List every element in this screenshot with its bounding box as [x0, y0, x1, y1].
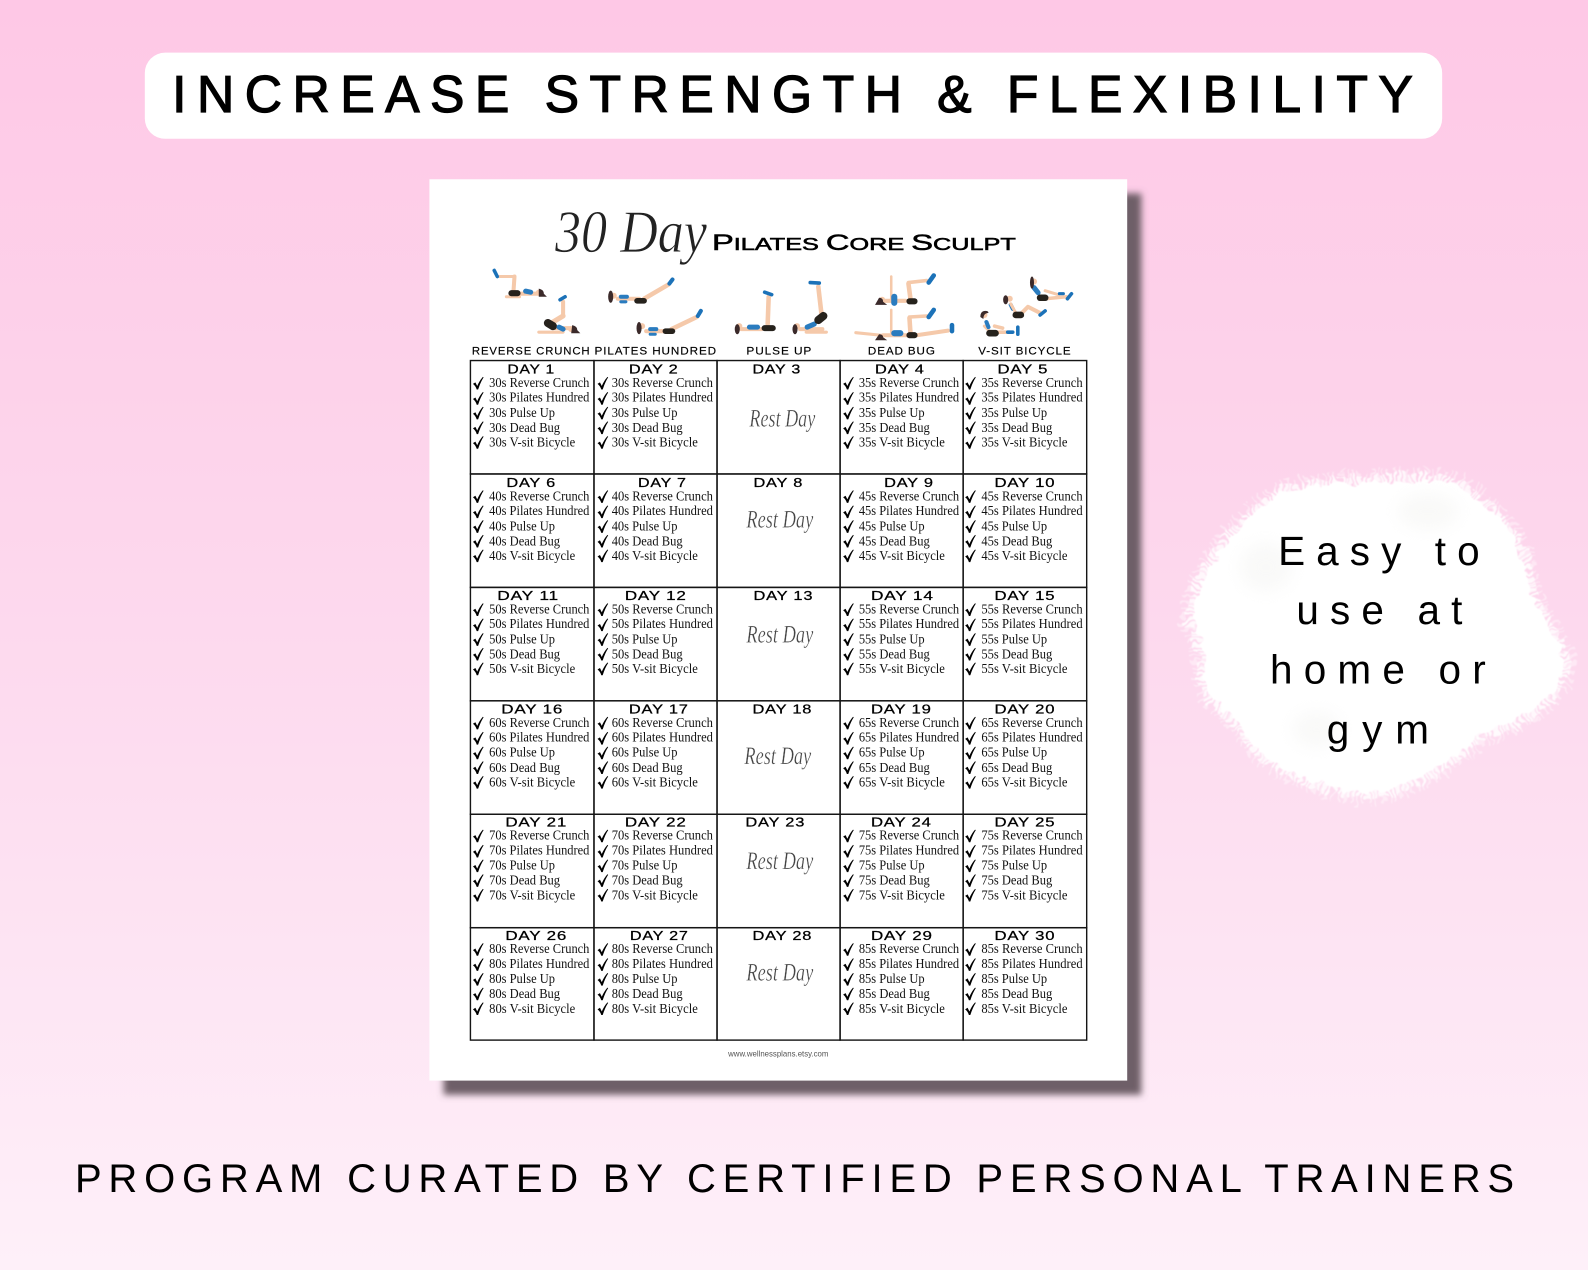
day 30: 85s V-sit Bicycle: [981, 1001, 1068, 1016]
day 23 rest: [717, 814, 840, 928]
day 29: 85s Dead Bug: [859, 986, 930, 1001]
day 9: 45s Dead Bug: [859, 533, 930, 548]
day 20: DAY 20: [995, 703, 1055, 717]
day 6: [470, 474, 594, 587]
day 17: 60s Reverse Crunch: [612, 715, 713, 730]
day 12: [594, 587, 717, 701]
day 4: 35s Reverse Crunch: [859, 375, 959, 390]
day 3 rest: [717, 361, 840, 474]
day 19: 65s V-sit Bicycle: [859, 775, 945, 790]
day 8 rest: DAY 8: [753, 476, 803, 490]
day 25: DAY 25: [995, 816, 1055, 830]
day 15: DAY 15: [995, 589, 1055, 603]
day 11: 50s Pilates Hundred: [489, 616, 590, 631]
day 29: [840, 928, 963, 1040]
day 19: 65s Pulse Up: [859, 745, 925, 760]
day 6: 40s Pilates Hundred: [489, 503, 590, 518]
day 22: [594, 814, 717, 928]
callout: easy to use at home or gym: [1193, 480, 1564, 792]
day 7: 40s Pilates Hundred: [612, 503, 713, 518]
day 1: 30s Reverse Crunch: [489, 375, 590, 390]
day 7: DAY 7: [638, 476, 687, 490]
calendar grid: [470, 361, 1087, 1040]
day 16: [470, 701, 594, 814]
day 27: 80s Pulse Up: [612, 971, 678, 986]
day 25: 75s Reverse Crunch: [981, 828, 1083, 843]
day 5: 35s Pilates Hundred: [981, 390, 1083, 405]
day 24: 75s Dead Bug: [859, 873, 930, 888]
day 16: 60s Reverse Crunch: [489, 715, 590, 730]
day 10: DAY 10: [995, 476, 1055, 490]
day 30: 85s Reverse Crunch: [981, 941, 1083, 956]
day 11: [470, 587, 594, 701]
day 15: 55s V-sit Bicycle: [981, 661, 1068, 676]
day 22: 70s Pilates Hundred: [612, 842, 713, 857]
day 29: 85s V-sit Bicycle: [859, 1001, 945, 1016]
icon: dead bug figures: [856, 275, 952, 340]
day 1: 30s Pulse Up: [489, 405, 555, 420]
day 15: 55s Pulse Up: [981, 631, 1048, 646]
day 10: 45s V-sit Bicycle: [981, 548, 1068, 563]
day 22: DAY 22: [625, 816, 687, 830]
day 28 rest: [717, 928, 840, 1040]
day 27: DAY 27: [630, 929, 689, 943]
day 22: 70s Reverse Crunch: [612, 828, 713, 843]
day 12: 50s Pulse Up: [612, 631, 678, 646]
day 15: 55s Reverse Crunch: [981, 601, 1083, 616]
day 15: 55s Pilates Hundred: [981, 616, 1083, 631]
icon: v-sit bicycle figures: [980, 276, 1071, 334]
day 25: 75s Pilates Hundred: [981, 842, 1083, 857]
day 25: 75s V-sit Bicycle: [981, 887, 1068, 902]
day 2: [594, 361, 717, 474]
icon: reverse crunch figures: [494, 270, 580, 333]
sheet: [429, 179, 1127, 1081]
day 11: DAY 11: [497, 589, 559, 603]
day 9: DAY 9: [884, 476, 934, 490]
day 22: 70s V-sit Bicycle: [612, 887, 698, 902]
day 14: [840, 587, 963, 701]
footer tagline: PROGRAM CURATED BY CERTIFIED PERSONAL TRAINERS: [75, 1157, 1514, 1201]
day 26: 80s Pilates Hundred: [489, 956, 590, 971]
day 20: 65s V-sit Bicycle: [981, 775, 1068, 790]
day 7: 40s Reverse Crunch: [612, 488, 713, 503]
day 16: DAY 16: [501, 703, 563, 717]
day 21: DAY 21: [505, 816, 567, 830]
callout: easy to use at home or gym: gym: [1327, 706, 1429, 752]
day 1: DAY 1: [507, 363, 555, 377]
day 20: 65s Pilates Hundred: [981, 730, 1083, 745]
day 9: 45s Reverse Crunch: [859, 488, 959, 503]
day 20: [963, 701, 1087, 814]
day 12: 50s Dead Bug: [612, 646, 683, 661]
day 1: 30s Dead Bug: [489, 420, 560, 435]
day 28 rest: Rest Day: [746, 958, 814, 986]
day 5: 35s Reverse Crunch: [981, 375, 1083, 390]
day 12: 50s V-sit Bicycle: [612, 661, 698, 676]
day 14: 55s V-sit Bicycle: [859, 661, 945, 676]
day 24: 75s Pulse Up: [859, 858, 925, 873]
day 3 rest: DAY 3: [752, 363, 801, 377]
day 11: 50s Reverse Crunch: [489, 601, 590, 616]
day 2: 30s Pilates Hundred: [612, 390, 713, 405]
day 2: 30s Reverse Crunch: [612, 375, 713, 390]
day 2: 30s V-sit Bicycle: [612, 435, 698, 450]
sheet title: [554, 199, 1017, 266]
day 20: 65s Reverse Crunch: [981, 715, 1083, 730]
day 1: 30s Pilates Hundred: [489, 390, 590, 405]
day 26: 80s Dead Bug: [489, 986, 560, 1001]
icon: pulse up figures: [735, 283, 826, 334]
exercise labels: [472, 345, 1071, 357]
day 25: 75s Pulse Up: [981, 858, 1048, 873]
day 28 rest: DAY 28: [752, 929, 812, 943]
day 11: 50s Pulse Up: [489, 631, 555, 646]
day 3 rest: Rest Day: [749, 404, 816, 432]
day 17: [594, 701, 717, 814]
day 4: [840, 361, 963, 474]
day 14: 55s Dead Bug: [859, 646, 930, 661]
day 5: 35s Pulse Up: [981, 405, 1048, 420]
day 8 rest: [717, 474, 840, 587]
day 26: 80s Pulse Up: [489, 971, 555, 986]
day 17: 60s Dead Bug: [612, 760, 683, 775]
day 10: [963, 474, 1087, 587]
day 24: 75s V-sit Bicycle: [859, 887, 945, 902]
callout: easy to use at home or gym: use at: [1296, 587, 1462, 633]
printable calendar sheet with shadow: [429, 179, 1141, 1095]
day 29: 85s Pulse Up: [859, 971, 925, 986]
day 6: 40s Dead Bug: [489, 533, 560, 548]
day 10: 45s Pulse Up: [981, 518, 1048, 533]
day 24: DAY 24: [871, 816, 932, 830]
day 21: 70s Dead Bug: [489, 873, 560, 888]
day 22: 70s Pulse Up: [612, 858, 678, 873]
day 20: 65s Pulse Up: [981, 745, 1048, 760]
day 24: [840, 814, 963, 928]
day 12: DAY 12: [625, 589, 687, 603]
day 23 rest: Rest Day: [746, 847, 814, 875]
day 9: 45s V-sit Bicycle: [859, 548, 945, 563]
exercise labels: PILATES HUNDRED: [594, 345, 717, 357]
day 13 rest: Rest Day: [746, 621, 814, 649]
day 10: 45s Reverse Crunch: [981, 488, 1083, 503]
callout: easy to use at home or gym: Easy to: [1278, 528, 1480, 574]
day 14: 55s Reverse Crunch: [859, 601, 959, 616]
exercise illustrations: [494, 270, 1071, 340]
day 26: DAY 26: [505, 929, 567, 943]
callout: easy to use at home or gym: home or: [1270, 647, 1486, 693]
day 19: 65s Dead Bug: [859, 760, 930, 775]
day 27: 80s Dead Bug: [612, 986, 683, 1001]
day 18 rest: Rest Day: [744, 742, 812, 770]
day 21: [470, 814, 594, 928]
day 7: 40s Dead Bug: [612, 533, 683, 548]
sheet drop shadow: [444, 193, 1141, 1095]
day 21: 70s Pilates Hundred: [489, 842, 590, 857]
day 16: 60s V-sit Bicycle: [489, 775, 575, 790]
exercise labels: PULSE UP: [746, 345, 812, 357]
day 19: DAY 19: [871, 703, 932, 717]
header banner: [145, 53, 1442, 139]
day 15: 55s Dead Bug: [981, 646, 1053, 661]
day 16: 60s Pilates Hundred: [489, 730, 590, 745]
day 6: 40s V-sit Bicycle: [489, 548, 575, 563]
sheet title: 30 Day: [554, 199, 707, 266]
day 13 rest: DAY 13: [753, 589, 813, 603]
day 30: 85s Pulse Up: [981, 971, 1048, 986]
day 15: [963, 587, 1087, 701]
day 30: DAY 30: [995, 929, 1055, 943]
day 1: [470, 361, 594, 474]
day 30: 85s Pilates Hundred: [981, 956, 1083, 971]
day 18 rest: [717, 701, 840, 814]
day 11: 50s Dead Bug: [489, 646, 560, 661]
day 13 rest: [717, 587, 840, 701]
day 10: 45s Pilates Hundred: [981, 503, 1083, 518]
day 20: 65s Dead Bug: [981, 760, 1053, 775]
day 27: 80s Reverse Crunch: [612, 941, 713, 956]
frayed white blob: [1193, 480, 1564, 792]
day 9: 45s Pulse Up: [859, 518, 925, 533]
website url: www.wellnessplans.etsy.com: [727, 1049, 829, 1058]
sheet title: P ILATES C ORE S CULPT: [712, 230, 1017, 255]
day 26: 80s V-sit Bicycle: [489, 1001, 575, 1016]
day 2: 30s Dead Bug: [612, 420, 683, 435]
day 12: 50s Pilates Hundred: [612, 616, 713, 631]
day 4: 35s Dead Bug: [859, 420, 930, 435]
day 5: DAY 5: [998, 363, 1048, 377]
day 9: [840, 474, 963, 587]
day 25: [963, 814, 1087, 928]
day 22: 70s Dead Bug: [612, 873, 683, 888]
day 24: 75s Pilates Hundred: [859, 842, 959, 857]
day 27: 80s Pilates Hundred: [612, 956, 713, 971]
day 2: 30s Pulse Up: [612, 405, 678, 420]
day 29: 85s Reverse Crunch: [859, 941, 959, 956]
day 4: DAY 4: [875, 363, 925, 377]
day 17: 60s Pilates Hundred: [612, 730, 713, 745]
day 23 rest: DAY 23: [745, 816, 805, 830]
day 17: DAY 17: [629, 703, 689, 717]
day 10: 45s Dead Bug: [981, 533, 1053, 548]
day 14: DAY 14: [871, 589, 934, 603]
day 7: 40s Pulse Up: [612, 518, 678, 533]
day 5: 35s V-sit Bicycle: [981, 435, 1068, 450]
day 19: 65s Reverse Crunch: [859, 715, 959, 730]
day 4: 35s V-sit Bicycle: [859, 435, 945, 450]
day 14: 55s Pulse Up: [859, 631, 925, 646]
day 17: 60s V-sit Bicycle: [612, 775, 698, 790]
day 18 rest: DAY 18: [752, 703, 812, 717]
exercise labels: V-SIT BICYCLE: [978, 345, 1071, 357]
day 21: 70s V-sit Bicycle: [489, 887, 575, 902]
day 17: 60s Pulse Up: [612, 745, 678, 760]
day 24: 75s Reverse Crunch: [859, 828, 959, 843]
day 4: 35s Pilates Hundred: [859, 390, 959, 405]
day 1: 30s V-sit Bicycle: [489, 435, 575, 450]
day 14: 55s Pilates Hundred: [859, 616, 959, 631]
day 5: 35s Dead Bug: [981, 420, 1053, 435]
day 11: 50s V-sit Bicycle: [489, 661, 575, 676]
day 9: 45s Pilates Hundred: [859, 503, 959, 518]
day 2: DAY 2: [629, 363, 679, 377]
day 21: 70s Pulse Up: [489, 858, 555, 873]
day 16: 60s Pulse Up: [489, 745, 555, 760]
day 29: 85s Pilates Hundred: [859, 956, 959, 971]
day 27: 80s V-sit Bicycle: [612, 1001, 698, 1016]
day 29: DAY 29: [871, 929, 933, 943]
day 16: 60s Dead Bug: [489, 760, 560, 775]
exercise labels: DEAD BUG: [868, 345, 936, 357]
day 6: DAY 6: [506, 476, 556, 490]
day 7: 40s V-sit Bicycle: [612, 548, 698, 563]
day 26: 80s Reverse Crunch: [489, 941, 590, 956]
day 25: 75s Dead Bug: [981, 873, 1053, 888]
day 27: [594, 928, 717, 1040]
day 19: 65s Pilates Hundred: [859, 730, 959, 745]
day 5: [963, 361, 1087, 474]
day 21: 70s Reverse Crunch: [489, 828, 590, 843]
day 26: [470, 928, 594, 1040]
day 30: [963, 928, 1087, 1040]
day 8 rest: Rest Day: [746, 506, 814, 534]
day 7: [594, 474, 717, 587]
header banner: INCREASE STRENGTH & FLEXIBILITY: [172, 65, 1413, 123]
day 4: 35s Pulse Up: [859, 405, 925, 420]
day 6: 40s Pulse Up: [489, 518, 555, 533]
day 6: 40s Reverse Crunch: [489, 488, 590, 503]
icon: pilates hundred figures: [608, 280, 701, 334]
day 12: 50s Reverse Crunch: [612, 601, 713, 616]
day 30: 85s Dead Bug: [981, 986, 1053, 1001]
day 19: [840, 701, 963, 814]
exercise labels: REVERSE CRUNCH: [472, 345, 590, 357]
